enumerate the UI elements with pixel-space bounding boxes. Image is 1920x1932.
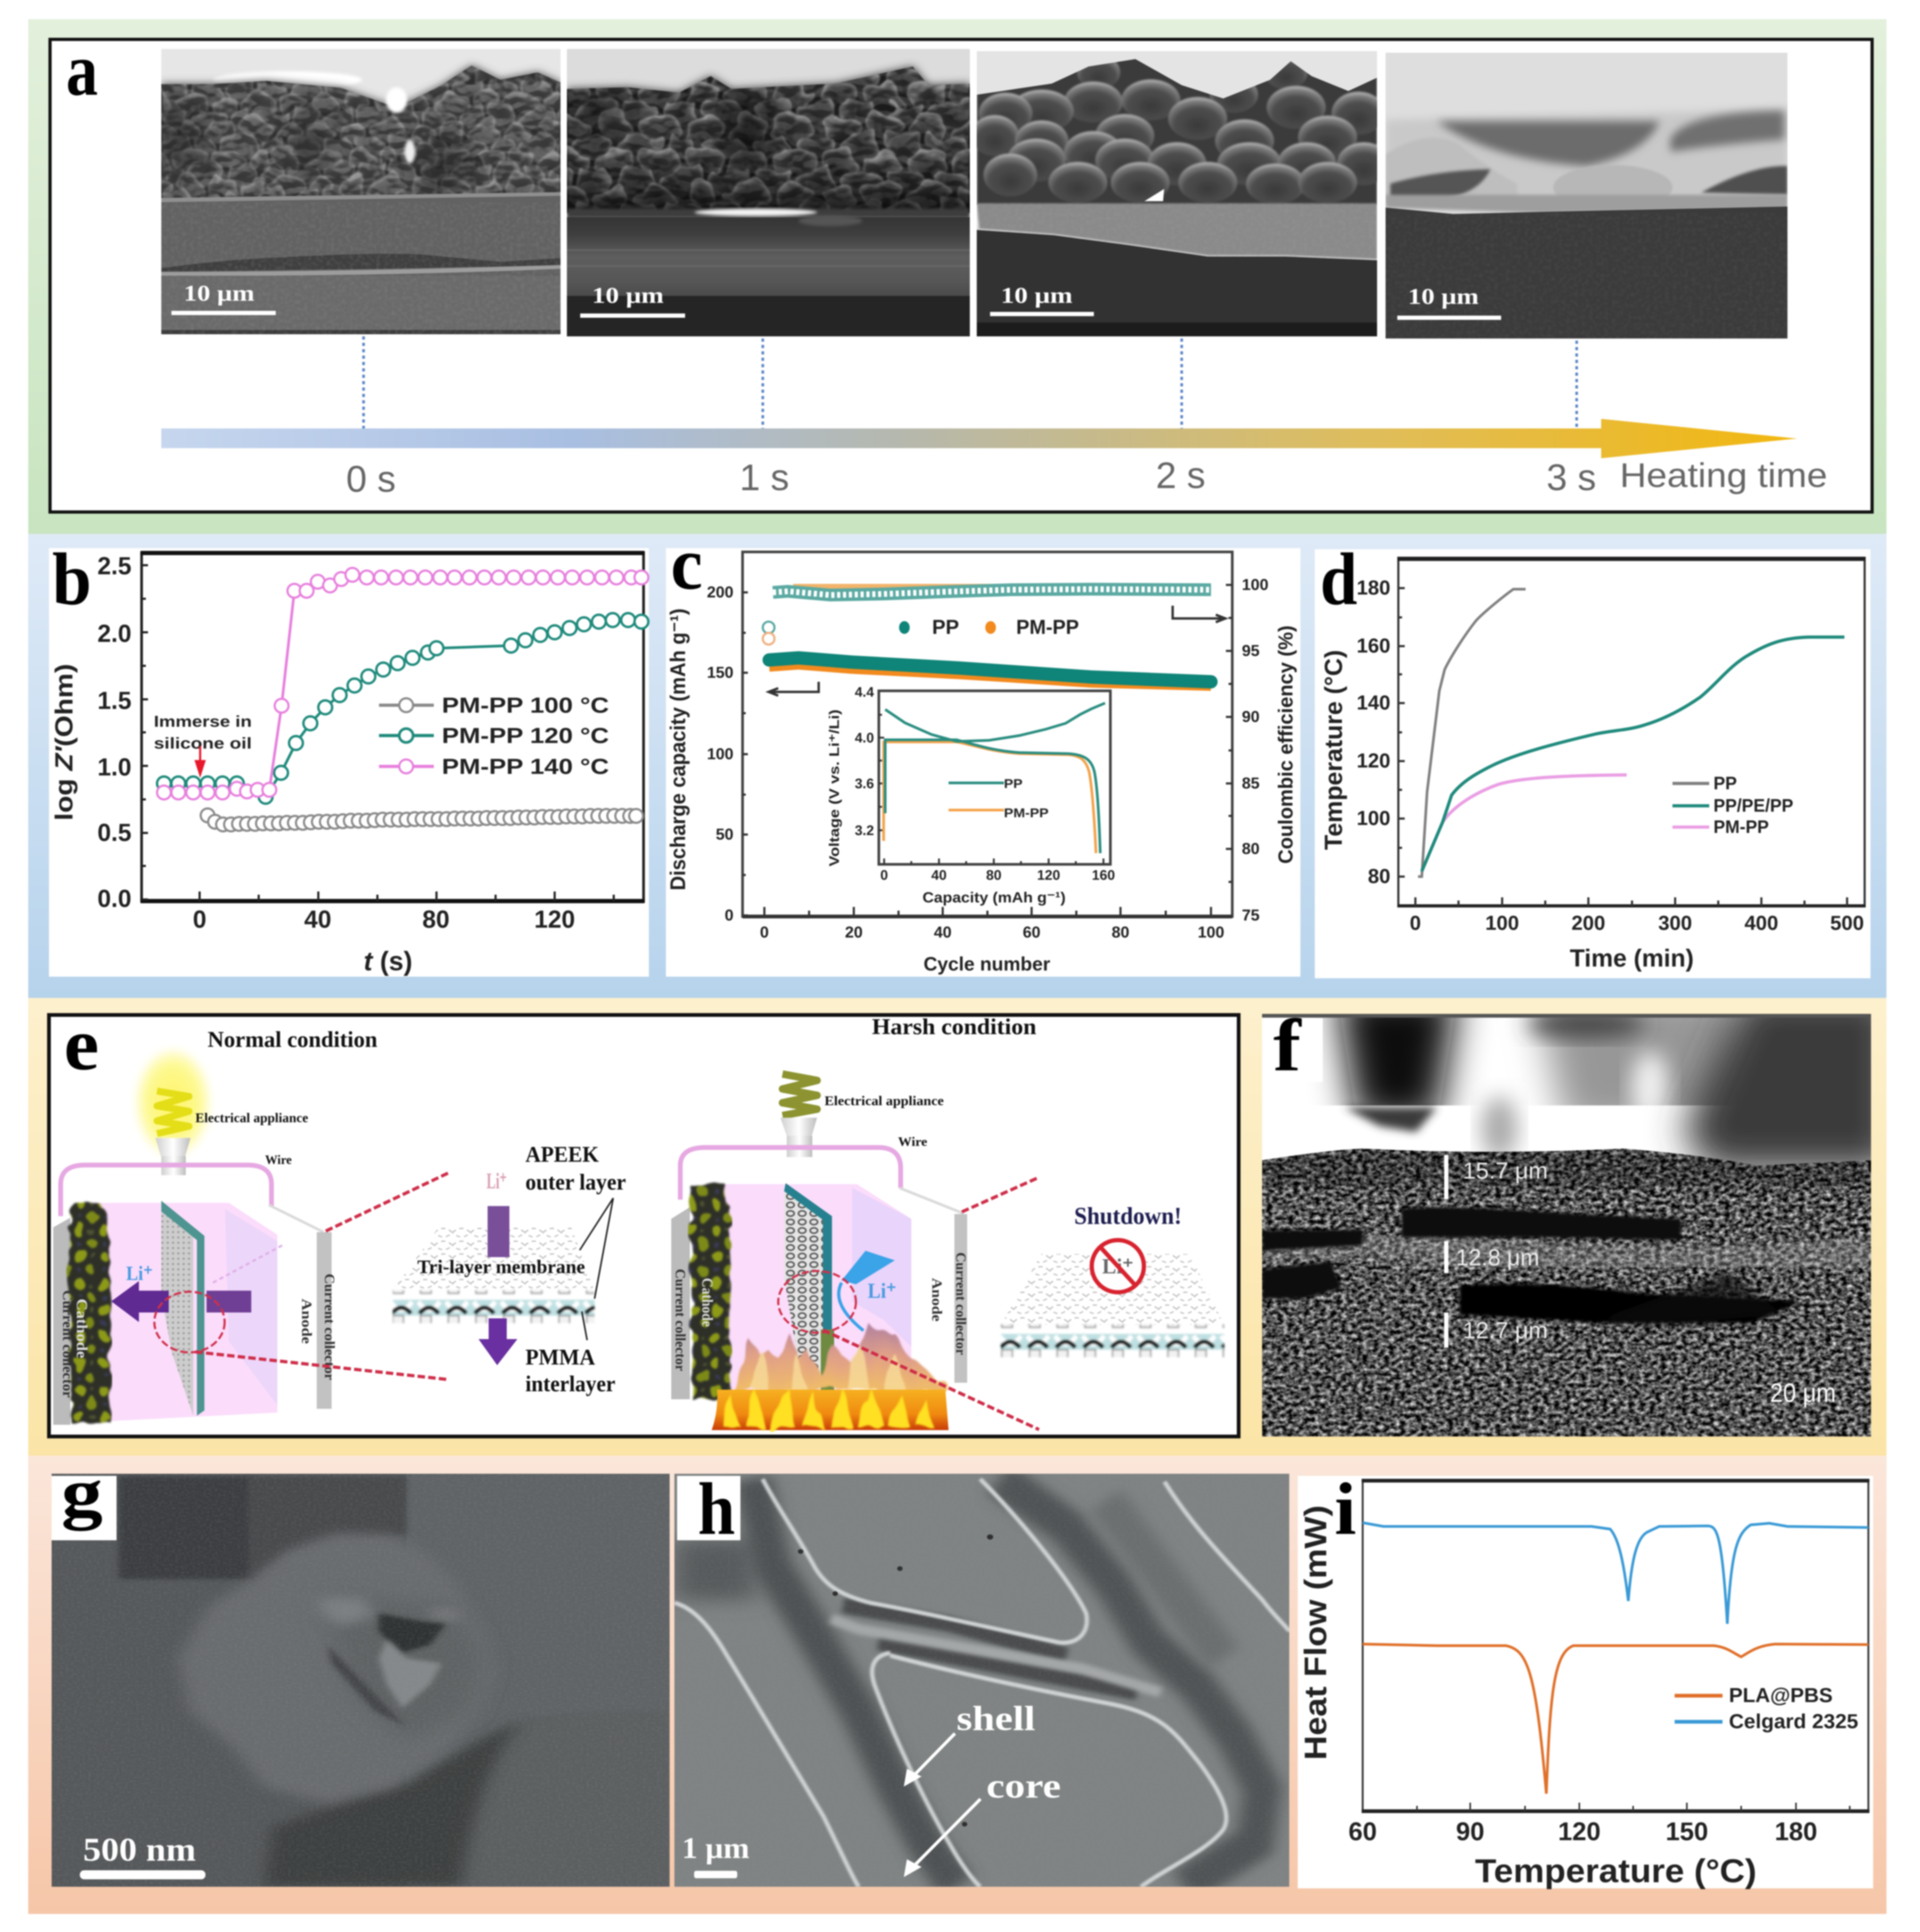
background band: panels e f [28,998,1886,1456]
left axis tick labels: 0 [724,907,734,924]
x tick labels [1410,912,1864,935]
scale bar 2 s [990,284,1094,316]
heating time arrow [161,419,1797,458]
pink series PM-PP 140 C [164,575,641,792]
inset voltage chart: 160 [1092,867,1115,883]
panel label b: b [52,538,92,621]
inset voltage chart: PM-PP [1004,806,1049,821]
wire [61,1165,271,1216]
legend: PM-PP [1016,616,1079,639]
labels appliance and wire right: Electrical appliance [825,1094,944,1108]
SEM image 1 s [554,37,985,336]
scale bar 500 nm: 500 nm [83,1832,196,1868]
axis titles: Discharge capacity (mAh g⁻¹) [666,608,690,890]
y tick labels [1357,577,1390,888]
right battery: Anode [929,1278,944,1322]
legend: PM-PP 140 °C [442,754,609,779]
time labels: 1 s [739,457,789,498]
y tick labels: 140 [1357,692,1390,714]
tick labels: 60 [1348,1818,1377,1846]
axes [1398,559,1865,906]
axes [142,553,644,901]
left axis tick labels: 100 [707,745,734,763]
legend: PP [1713,773,1737,794]
y tick labels: 1.5 [97,687,131,714]
axis titles [666,608,1297,975]
x axis tick labels: 100 [1198,924,1224,941]
panel label g: g [61,1455,103,1531]
dark bulb [780,1074,817,1157]
axis titles: Cycle number [924,953,1050,975]
shell annotation: shell [957,1699,1035,1738]
thickness markers [1444,1155,1448,1348]
panel label c: c [671,523,703,605]
right axis tick labels: 90 [1242,708,1259,726]
panel label d: d [1320,538,1357,621]
SEM image 3 s [1386,53,1787,338]
x tick labels: 300 [1658,912,1692,935]
panel i: DSC chart [1298,1468,1873,1889]
legend [1675,1685,1858,1733]
time labels: 3 s [1546,457,1596,498]
x axis tick labels [760,924,1224,941]
x tick labels: 200 [1571,912,1605,935]
panel label a: a [66,29,98,111]
inset voltage chart: Capacity (mAh g⁻¹) [922,889,1066,906]
inset voltage chart: Voltage (V vs. Li⁺/Li) [826,709,842,866]
x tick labels: 0 [1410,912,1421,935]
left battery: Current collector [60,1290,76,1398]
labels appliance and wire right: Wire [898,1135,927,1149]
right battery: Current collector [673,1269,688,1371]
thickness labels: 12.7 μm [1463,1318,1548,1343]
x axis tick labels: 40 [934,924,952,941]
legend [379,693,609,779]
right axis tick labels: 85 [1242,775,1259,792]
heating time label: Heating time [1620,456,1827,494]
right axis tick labels: 100 [1242,576,1268,594]
legend: PP [932,616,959,639]
thickness labels [1456,1158,1548,1343]
inset voltage chart: 80 [986,867,1001,883]
legend [899,616,1079,639]
panel g: SEM nanofibre [52,1455,670,1887]
right axis tick labels [1242,576,1268,924]
left battery: Li⁺ [126,1262,153,1285]
labels appliance and wire [195,1111,308,1167]
x tick labels: 40 [304,905,332,933]
glowing bulb [136,1050,210,1175]
right battery: Li⁺ [868,1278,896,1303]
panel label i: i [1334,1468,1356,1550]
right battery [671,1183,969,1399]
labels appliance and wire: Wire [265,1153,292,1167]
tick labels: 150 [1666,1818,1708,1846]
fibre layers [1262,1144,1871,1436]
inset voltage chart: 4.4 [855,684,875,700]
zoom lines right [823,1177,1039,1430]
legend [1672,773,1793,837]
y tick labels: 160 [1357,635,1390,657]
legend: PM-PP [1713,817,1769,837]
membrane detail right with no-entry sign: Li⁺ [1102,1254,1133,1278]
scale bar 2 s: 10 μm [1001,284,1073,308]
labels appliance and wire right [825,1094,944,1149]
membrane detail center: interlayer [525,1372,615,1397]
axis titles [1299,1505,1757,1889]
curve PP [1418,589,1526,877]
background band: panels b c d [28,534,1886,998]
legend: PM-PP 120 °C [442,723,609,748]
scale bar 3 s: 10 μm [1408,285,1479,309]
SEM image 2 s [971,51,1390,336]
y tick labels: 80 [1368,865,1390,888]
inset voltage chart: 3.6 [855,775,874,791]
y tick labels: 0.5 [97,819,131,846]
time labels [346,455,1596,500]
tick labels: 180 [1775,1818,1817,1846]
inset voltage chart: PP [1004,777,1023,791]
left battery: Anode [299,1299,314,1344]
membrane detail center: outer layer [525,1170,626,1195]
y axis title: log Z′(Ohm) [50,664,78,821]
y tick labels: 100 [1357,807,1390,830]
annotation: immerse in silicone oil: Immerse in [154,713,252,730]
x tick labels: 100 [1485,912,1519,935]
scale bar 1 um [682,1832,749,1878]
panel d: temperature chart [1315,538,1870,978]
white label box [52,1476,117,1540]
membrane detail center: APEEK [525,1143,599,1167]
y tick labels: 1.0 [97,753,131,781]
axis titles: Temperature (°C) [1320,650,1347,850]
x axis tick labels: 60 [1023,924,1041,941]
membrane detail center [391,1143,626,1397]
thickness labels: 12.8 μm [1456,1244,1539,1271]
y tick labels: 2.0 [97,620,131,647]
x axis title: t (s) [364,946,413,976]
background band: panel a [28,19,1886,534]
x tick labels: 500 [1830,912,1864,935]
x tick labels [193,905,575,933]
left axis tick labels: 150 [707,664,734,681]
flames [712,1323,949,1430]
direction arrows [769,606,1225,696]
SEM image 0 s [149,37,575,334]
gray series PM-PP 100 C [208,815,636,824]
zoom lines left [195,1173,448,1380]
tick labels: 120 [1558,1818,1601,1846]
axes [1363,1481,1868,1811]
discharge capacity series [769,658,1211,686]
membrane detail right with no-entry sign [1001,1240,1224,1357]
panel e: battery schematic [49,1003,1239,1436]
inset voltage chart: 4.0 [855,730,874,746]
membrane detail center: PMMA [525,1345,596,1370]
background band: panels g h i [28,1456,1886,1914]
axis titles: Heat Flow (mW) [1299,1505,1333,1760]
membrane detail center: Li⁺ [487,1169,507,1194]
x tick labels: 80 [422,905,450,933]
right battery: Current collector [953,1252,969,1355]
curve PM-PP [1422,775,1627,871]
core annotation [906,1767,1061,1874]
axis titles: Time (min) [1570,944,1694,972]
left battery [53,1201,337,1425]
labels appliance and wire: Electrical appliance [195,1111,308,1125]
y tick labels: 180 [1357,577,1390,599]
tick labels: 90 [1456,1818,1485,1846]
core annotation: core [986,1767,1061,1805]
panel a: heating time SEM series [50,29,1872,512]
left axis tick labels: 50 [716,826,734,843]
membrane detail center: Tri-layer membrane [417,1256,585,1277]
scale bar 500 nm [80,1832,205,1879]
heading harsh condition: Harsh condition [872,1015,1036,1039]
right axis tick labels: 75 [1242,907,1259,924]
x axis tick labels: 0 [760,924,769,941]
legend: PP/PE/PP [1713,796,1793,816]
x axis tick labels: 80 [1111,924,1130,941]
x tick labels: 0 [193,905,207,933]
left axis tick labels [707,583,734,924]
legend: PM-PP 100 °C [442,693,609,717]
left axis tick labels: 200 [707,583,734,601]
Celgard curve [1363,1523,1868,1624]
panel h: core-shell TEM [674,1468,1289,1887]
time labels: 2 s [1156,455,1206,496]
left battery: Cathode [73,1299,89,1358]
right axis tick labels: 95 [1242,642,1259,660]
right axis tick labels: 80 [1242,840,1259,858]
panel label h: h [698,1468,735,1550]
x tick labels: 400 [1744,912,1778,935]
axis titles [1320,650,1694,972]
legend: PLA@PBS [1729,1685,1833,1707]
axis titles: Temperature (°C) [1475,1853,1757,1889]
scale label: 20 μm [1770,1378,1836,1408]
x tick labels: 120 [534,905,575,933]
red arrow [196,746,204,774]
backgrounds and blob [52,1474,670,1887]
panel f: SEM cross section [1262,990,1895,1436]
y tick labels [97,552,131,912]
fibre network [674,1474,1289,1887]
panel label f: f [1273,1004,1302,1087]
scale bar 1 s: 10 μm [592,284,664,308]
scale bar 1 um: 1 μm [682,1832,749,1865]
wire right [680,1147,901,1200]
annotation: immerse in silicone oil [154,713,252,753]
y tick labels: 0.0 [97,885,131,912]
scale bar 0 s: 10 μm [184,282,254,306]
PLA@PBS curve [1363,1644,1868,1794]
axes [743,552,1232,917]
tick labels [1348,1818,1817,1846]
scale bar 1 s [580,284,685,318]
coulombic efficiency series [763,587,1211,645]
shutdown heading: Shutdown! [1074,1202,1182,1229]
scale bar 3 s [1397,285,1501,320]
y tick labels: 120 [1357,750,1390,772]
legend: Celgard 2325 [1729,1711,1858,1733]
inset voltage chart: 3.2 [855,822,874,838]
curve PP/PE/PP [1422,637,1844,871]
blurred background [1262,990,1895,1171]
dotted timeline connectors [364,336,1577,428]
white label box [677,1476,740,1540]
heading normal condition: Normal condition [208,1028,377,1052]
axis titles: Coulombic efficiency (%) [1275,625,1297,864]
y tick labels: 2.5 [97,552,131,580]
time labels: 0 s [346,458,396,500]
thickness labels: 15.7 μm [1463,1158,1548,1184]
inset voltage chart: 0 [880,867,888,883]
left battery: Current collector [322,1274,337,1380]
inset voltage chart: 120 [1037,867,1060,883]
panel label e: e [64,1003,99,1086]
inset voltage chart [826,684,1115,906]
inset voltage chart: 40 [932,867,946,883]
annotation: immerse in silicone oil: silicone oil [154,734,252,753]
scale bar 0 s [171,282,276,315]
panel c: cycling chart [666,523,1300,977]
panel b: impedance chart [49,538,649,977]
shell annotation [906,1699,1035,1784]
teal series PM-PP 120 C [164,620,641,797]
right battery: Cathode [698,1278,715,1327]
x axis tick labels: 20 [845,924,863,941]
